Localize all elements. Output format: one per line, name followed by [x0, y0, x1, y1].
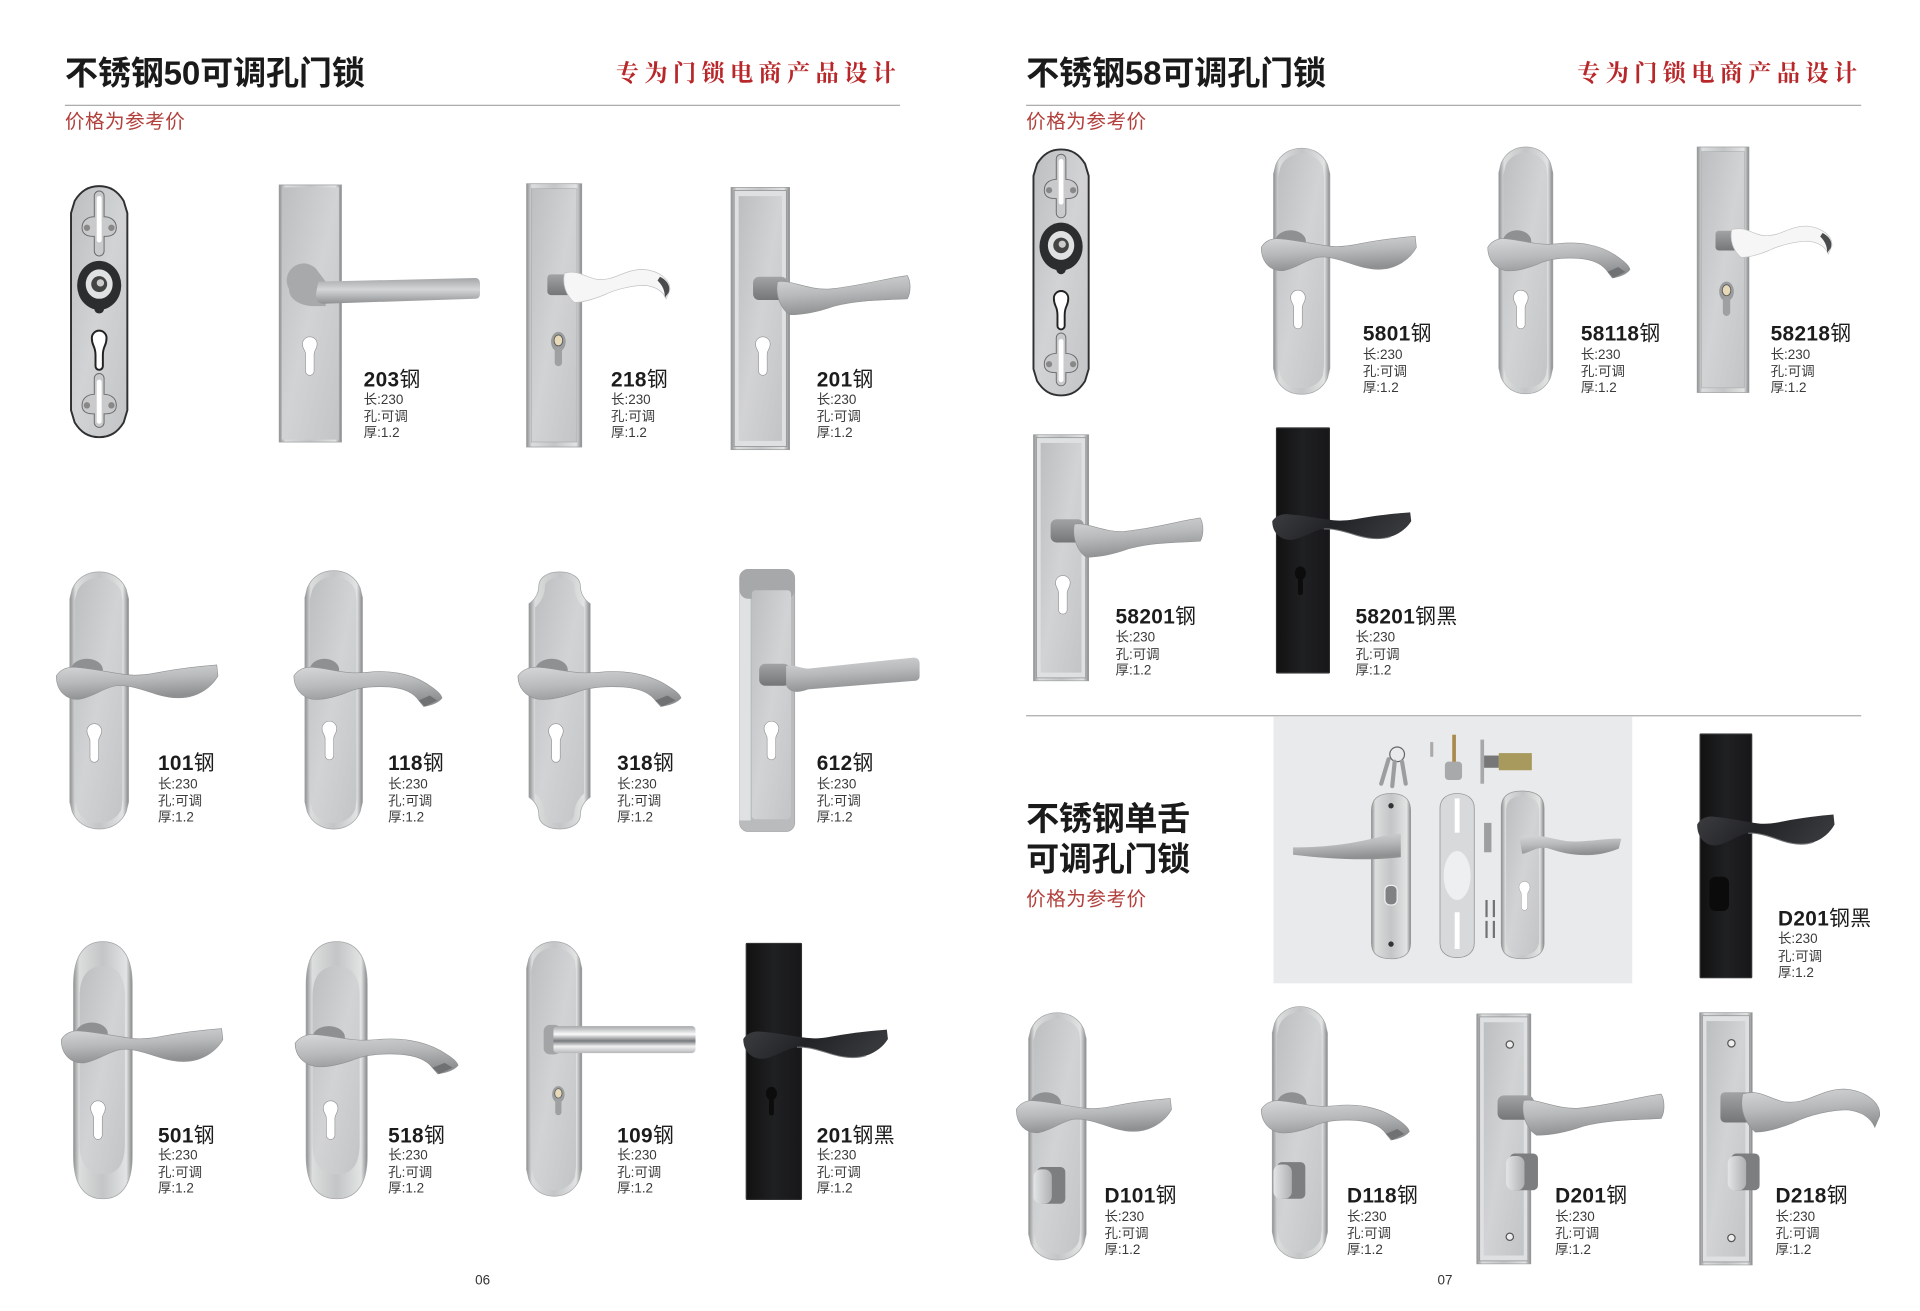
label 5801: 5801钢: [1363, 322, 1432, 345]
product: 518钢: [295, 942, 458, 1199]
label 58218: 孔:可调: [1771, 364, 1815, 379]
label 58118: 长:230: [1581, 347, 1620, 362]
product: 109钢: [527, 942, 696, 1196]
label 58201: [1116, 605, 1196, 678]
label 501: [158, 1124, 215, 1196]
title: 不锈钢58可调孔门锁: 不锈钢58可调孔门锁: [1026, 56, 1326, 93]
label 109: [617, 1124, 674, 1196]
label D101: D101钢: [1104, 1184, 1177, 1207]
label 109: 109钢: [617, 1124, 674, 1147]
label 109: 孔:可调: [617, 1165, 661, 1180]
label 612: 厚:1.2: [817, 810, 853, 825]
label 218: 长:230: [611, 392, 651, 407]
label 201 black: 厚:1.2: [817, 1181, 853, 1196]
label 58118: 厚:1.2: [1581, 380, 1617, 395]
label 58201: 58201钢: [1116, 605, 1196, 628]
label D201 black: 孔:可调: [1778, 949, 1822, 964]
label D201 black: D201钢黑: [1778, 908, 1871, 931]
label 218: 218钢: [611, 368, 668, 391]
heading: 不锈钢单舌可调孔门锁: [1026, 801, 1190, 879]
lock image 58118: [1488, 147, 1630, 394]
label 118: 孔:可调: [388, 794, 432, 809]
label 318: [617, 752, 674, 825]
lock image 501: [61, 942, 223, 1199]
product: 118钢: [294, 571, 444, 829]
label D201: D201钢: [1555, 1184, 1627, 1207]
label D118: D118钢: [1347, 1184, 1418, 1207]
label 101: 厚:1.2: [158, 810, 194, 825]
label 109: 厚:1.2: [617, 1181, 653, 1196]
panel: page 06: [56, 54, 920, 1288]
label 58118: 孔:可调: [1581, 364, 1625, 379]
label 58218: 厚:1.2: [1771, 380, 1807, 395]
label D201 black: 长:230: [1778, 931, 1818, 946]
lock image 5801: [1261, 148, 1416, 394]
label 101: 长:230: [158, 777, 198, 792]
label 501: 长:230: [158, 1148, 198, 1163]
label D118: 孔:可调: [1347, 1226, 1391, 1241]
label D101: 厚:1.2: [1104, 1242, 1140, 1257]
product: D101钢: [1016, 1013, 1177, 1260]
label D218: 长:230: [1776, 1209, 1815, 1224]
label 58201: 长:230: [1116, 630, 1155, 645]
label 612: [817, 752, 874, 825]
product: 203钢: [279, 185, 480, 442]
product: 201钢黑: [743, 943, 895, 1200]
label D218: [1776, 1184, 1848, 1257]
product: 58118钢: [1488, 147, 1661, 395]
label 201: [817, 368, 874, 440]
label D218: 孔:可调: [1776, 1226, 1820, 1241]
label D101: 孔:可调: [1104, 1226, 1149, 1241]
product: 5801钢: [1261, 148, 1432, 395]
label 201 black: [817, 1124, 895, 1196]
label 518: 孔:可调: [388, 1165, 432, 1180]
label 58201 black: [1356, 605, 1458, 678]
product: D201钢黑 upper: [1697, 734, 1871, 980]
price note: 价格为参考价: [1026, 889, 1146, 911]
label 58201 black: 长:230: [1356, 630, 1395, 645]
page number 06: 06: [475, 1273, 490, 1288]
product: 501钢: [61, 942, 223, 1199]
product: D118钢: [1261, 1007, 1418, 1259]
label 218: 厚:1.2: [611, 425, 647, 440]
label 5801: 厚:1.2: [1363, 380, 1399, 395]
lock image 218: [527, 184, 670, 447]
photo: lock kit parts: [1273, 716, 1632, 983]
label 101: 101钢: [158, 752, 215, 775]
label 201: 孔:可调: [817, 409, 861, 424]
label 612: 孔:可调: [817, 794, 861, 809]
label 118: 118钢: [388, 752, 444, 775]
product: D218钢: [1700, 1013, 1880, 1265]
label 318: 孔:可调: [617, 794, 661, 809]
label 318: 长:230: [617, 777, 657, 792]
lock image D118: [1261, 1007, 1409, 1259]
label 203: 孔:可调: [364, 409, 408, 424]
label D201: 厚:1.2: [1555, 1242, 1591, 1257]
mounting plate: [1033, 149, 1089, 395]
label 5801: [1363, 322, 1432, 395]
label 218: 孔:可调: [611, 409, 655, 424]
label 612: 612钢: [817, 752, 874, 775]
label 501: 501钢: [158, 1124, 215, 1147]
label 58218: 58218钢: [1771, 322, 1851, 345]
label 318: 318钢: [617, 752, 674, 775]
label D201: [1555, 1184, 1627, 1257]
label D201: 长:230: [1555, 1209, 1595, 1224]
label 203: 厚:1.2: [364, 425, 400, 440]
icon: keys: [1381, 747, 1406, 786]
product: 201钢: [731, 187, 910, 450]
slogan: 专为门锁电商产品设计: [616, 54, 901, 88]
label 5801: 孔:可调: [1363, 364, 1407, 379]
label D201 black: 厚:1.2: [1778, 965, 1814, 980]
label 58201 black: 58201钢黑: [1356, 605, 1458, 628]
lock image 201: [731, 187, 910, 450]
label 218: [611, 368, 668, 440]
lock image 118: [294, 571, 442, 829]
product: 58201钢黑: [1272, 427, 1458, 678]
label 501: 孔:可调: [158, 1165, 202, 1180]
lock image 518: [295, 942, 458, 1199]
lock image 109: [527, 942, 696, 1196]
product: 58201钢: [1033, 435, 1203, 681]
label 118: 厚:1.2: [388, 810, 424, 825]
label D218: D218钢: [1776, 1184, 1848, 1207]
label D201: 孔:可调: [1555, 1226, 1599, 1241]
label 101: 孔:可调: [158, 794, 202, 809]
label 318: 厚:1.2: [617, 810, 653, 825]
label 518: [388, 1124, 445, 1196]
product: D201钢: [1477, 1014, 1664, 1264]
icon: spindle and screws: [1484, 823, 1494, 938]
label 203: 长:230: [364, 392, 403, 407]
label 58201 black: 孔:可调: [1356, 647, 1400, 662]
panel: page 07: [1016, 54, 1880, 1288]
price note: 价格为参考价: [65, 111, 185, 133]
product: 218钢: [527, 184, 670, 447]
lock image 203: [279, 185, 480, 442]
label D101: [1104, 1184, 1177, 1257]
lock image 201 black: [743, 943, 888, 1200]
label 118: 长:230: [388, 777, 428, 792]
lock image D201: [1477, 1014, 1664, 1264]
label D218: 厚:1.2: [1776, 1242, 1811, 1257]
heading: 不锈钢单舌可调孔门锁: 可调孔门锁: [1026, 842, 1190, 879]
label 501: 厚:1.2: [158, 1181, 194, 1196]
label 201 black: 孔:可调: [817, 1165, 861, 1180]
lock image 612: [740, 569, 920, 831]
label 201: 厚:1.2: [817, 425, 853, 440]
icon: cylinder: [1430, 735, 1462, 780]
label 58201: 孔:可调: [1116, 647, 1160, 662]
lock image D201 black: [1697, 734, 1835, 978]
label D118: [1347, 1184, 1418, 1257]
product: 318钢: [518, 572, 681, 829]
label 201 black: 201钢黑: [817, 1124, 895, 1147]
label 58218: 长:230: [1771, 347, 1810, 362]
label 201 black: 长:230: [817, 1148, 856, 1163]
title: 不锈钢50可调孔门锁: 不锈钢50可调孔门锁: [65, 56, 365, 93]
icon: latch: [1480, 740, 1532, 784]
middle mounting plate: [1440, 794, 1474, 958]
label D118: 长:230: [1347, 1209, 1387, 1224]
label 518: 518钢: [388, 1124, 445, 1147]
lock image 58201 black: [1272, 427, 1411, 673]
label 203: 203钢: [364, 368, 421, 391]
label 109: 长:230: [617, 1148, 657, 1163]
label 101: [158, 752, 215, 825]
label 5801: 长:230: [1363, 347, 1402, 362]
label 201: 长:230: [817, 392, 856, 407]
product: 612钢: [740, 569, 920, 831]
label 518: 厚:1.2: [388, 1181, 424, 1196]
label 201: 201钢: [817, 368, 874, 391]
lock image 101: [56, 572, 218, 829]
label D201 black: [1778, 908, 1871, 980]
mounting plate: [71, 186, 127, 437]
label 612: 长:230: [817, 777, 856, 792]
product: 101钢: [56, 572, 218, 829]
label 58118: [1581, 322, 1661, 395]
price note: 价格为参考价: [1026, 111, 1146, 133]
slogan: 专为门锁电商产品设计: [1577, 54, 1862, 88]
right plate and handle: [1501, 791, 1621, 959]
label 58218: [1771, 322, 1851, 395]
label 118: [388, 752, 444, 825]
lock image D218: [1700, 1013, 1880, 1265]
label 203: [364, 368, 421, 440]
left plate and handle: [1293, 794, 1411, 959]
label 58201: 厚:1.2: [1116, 663, 1151, 678]
label 58118: 58118钢: [1581, 322, 1661, 345]
label 518: 长:230: [388, 1148, 428, 1163]
lock image D101: [1016, 1013, 1171, 1260]
lock image 318: [518, 572, 681, 829]
label 58201 black: 厚:1.2: [1356, 663, 1391, 678]
product: 58218钢: [1697, 147, 1851, 395]
lock image 58201: [1033, 435, 1203, 681]
heading: 不锈钢单舌可调孔门锁: 不锈钢单舌: [1026, 801, 1190, 838]
label D118: 厚:1.2: [1347, 1242, 1383, 1257]
page number 07: 07: [1438, 1273, 1453, 1288]
lock image 58218: [1697, 147, 1832, 393]
label D101: 长:230: [1104, 1209, 1144, 1224]
